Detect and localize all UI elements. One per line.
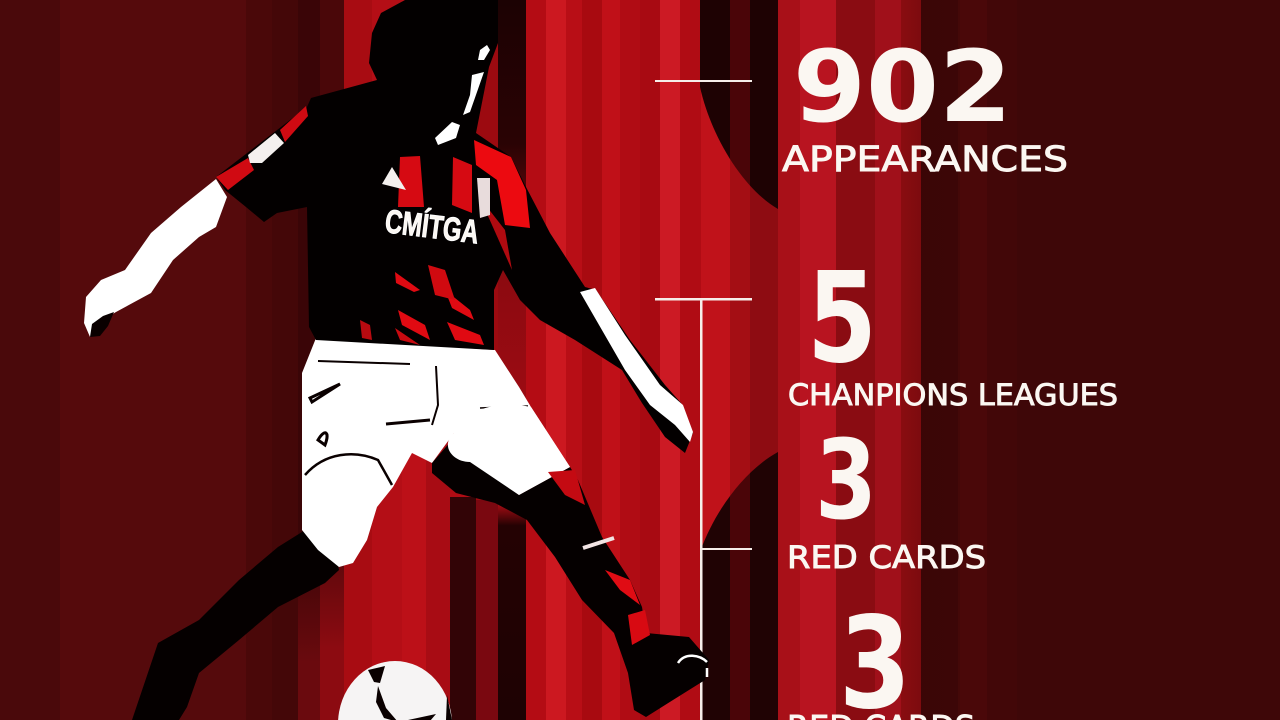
- stat: 3 red cards, cropped: [787, 589, 975, 720]
- connector lines: [655, 80, 752, 720]
- jersey and head silhouette: [216, 0, 693, 453]
- number 3: 3: [815, 416, 877, 544]
- stat: 3 red cards: [787, 416, 986, 576]
- label appearances: APPEARANCES: [782, 140, 1068, 180]
- sock red flashes: [548, 470, 585, 505]
- stat: 5 champions leagues: [788, 246, 1118, 412]
- right leg and sock (black): [432, 440, 709, 717]
- inner thigh white wedge: [448, 405, 570, 495]
- boot highlight: [678, 656, 707, 677]
- label red cards: RED CARDS: [787, 540, 986, 576]
- number 5: 5: [807, 246, 877, 391]
- right forearm white stripe: [580, 288, 693, 442]
- collar white marks: [478, 45, 490, 60]
- shorts and thigh (white): [302, 338, 570, 567]
- number 902: 902: [793, 30, 1012, 145]
- stat: 902 appearances: [782, 30, 1068, 180]
- back leg (black): [132, 517, 339, 720]
- label champions leagues: CHANPIONS LEAGUES: [788, 378, 1118, 412]
- left hand shadow: [90, 312, 114, 337]
- armband: [216, 158, 254, 190]
- football: [338, 661, 452, 720]
- dark curved band: top right: [700, 0, 778, 220]
- shorts detail lines: [305, 361, 528, 485]
- soft right-hand fade: [900, 0, 960, 720]
- dark curved band: lower right: [700, 440, 778, 720]
- sponsor text: CMÍTGA: [383, 202, 481, 250]
- jersey red stripes: [398, 156, 424, 207]
- club crest: [477, 178, 490, 218]
- left arm (white): [84, 179, 227, 337]
- sponsor logo triangle: [382, 167, 406, 190]
- player figure: [84, 0, 709, 720]
- lower jersey red flashes: [395, 272, 420, 292]
